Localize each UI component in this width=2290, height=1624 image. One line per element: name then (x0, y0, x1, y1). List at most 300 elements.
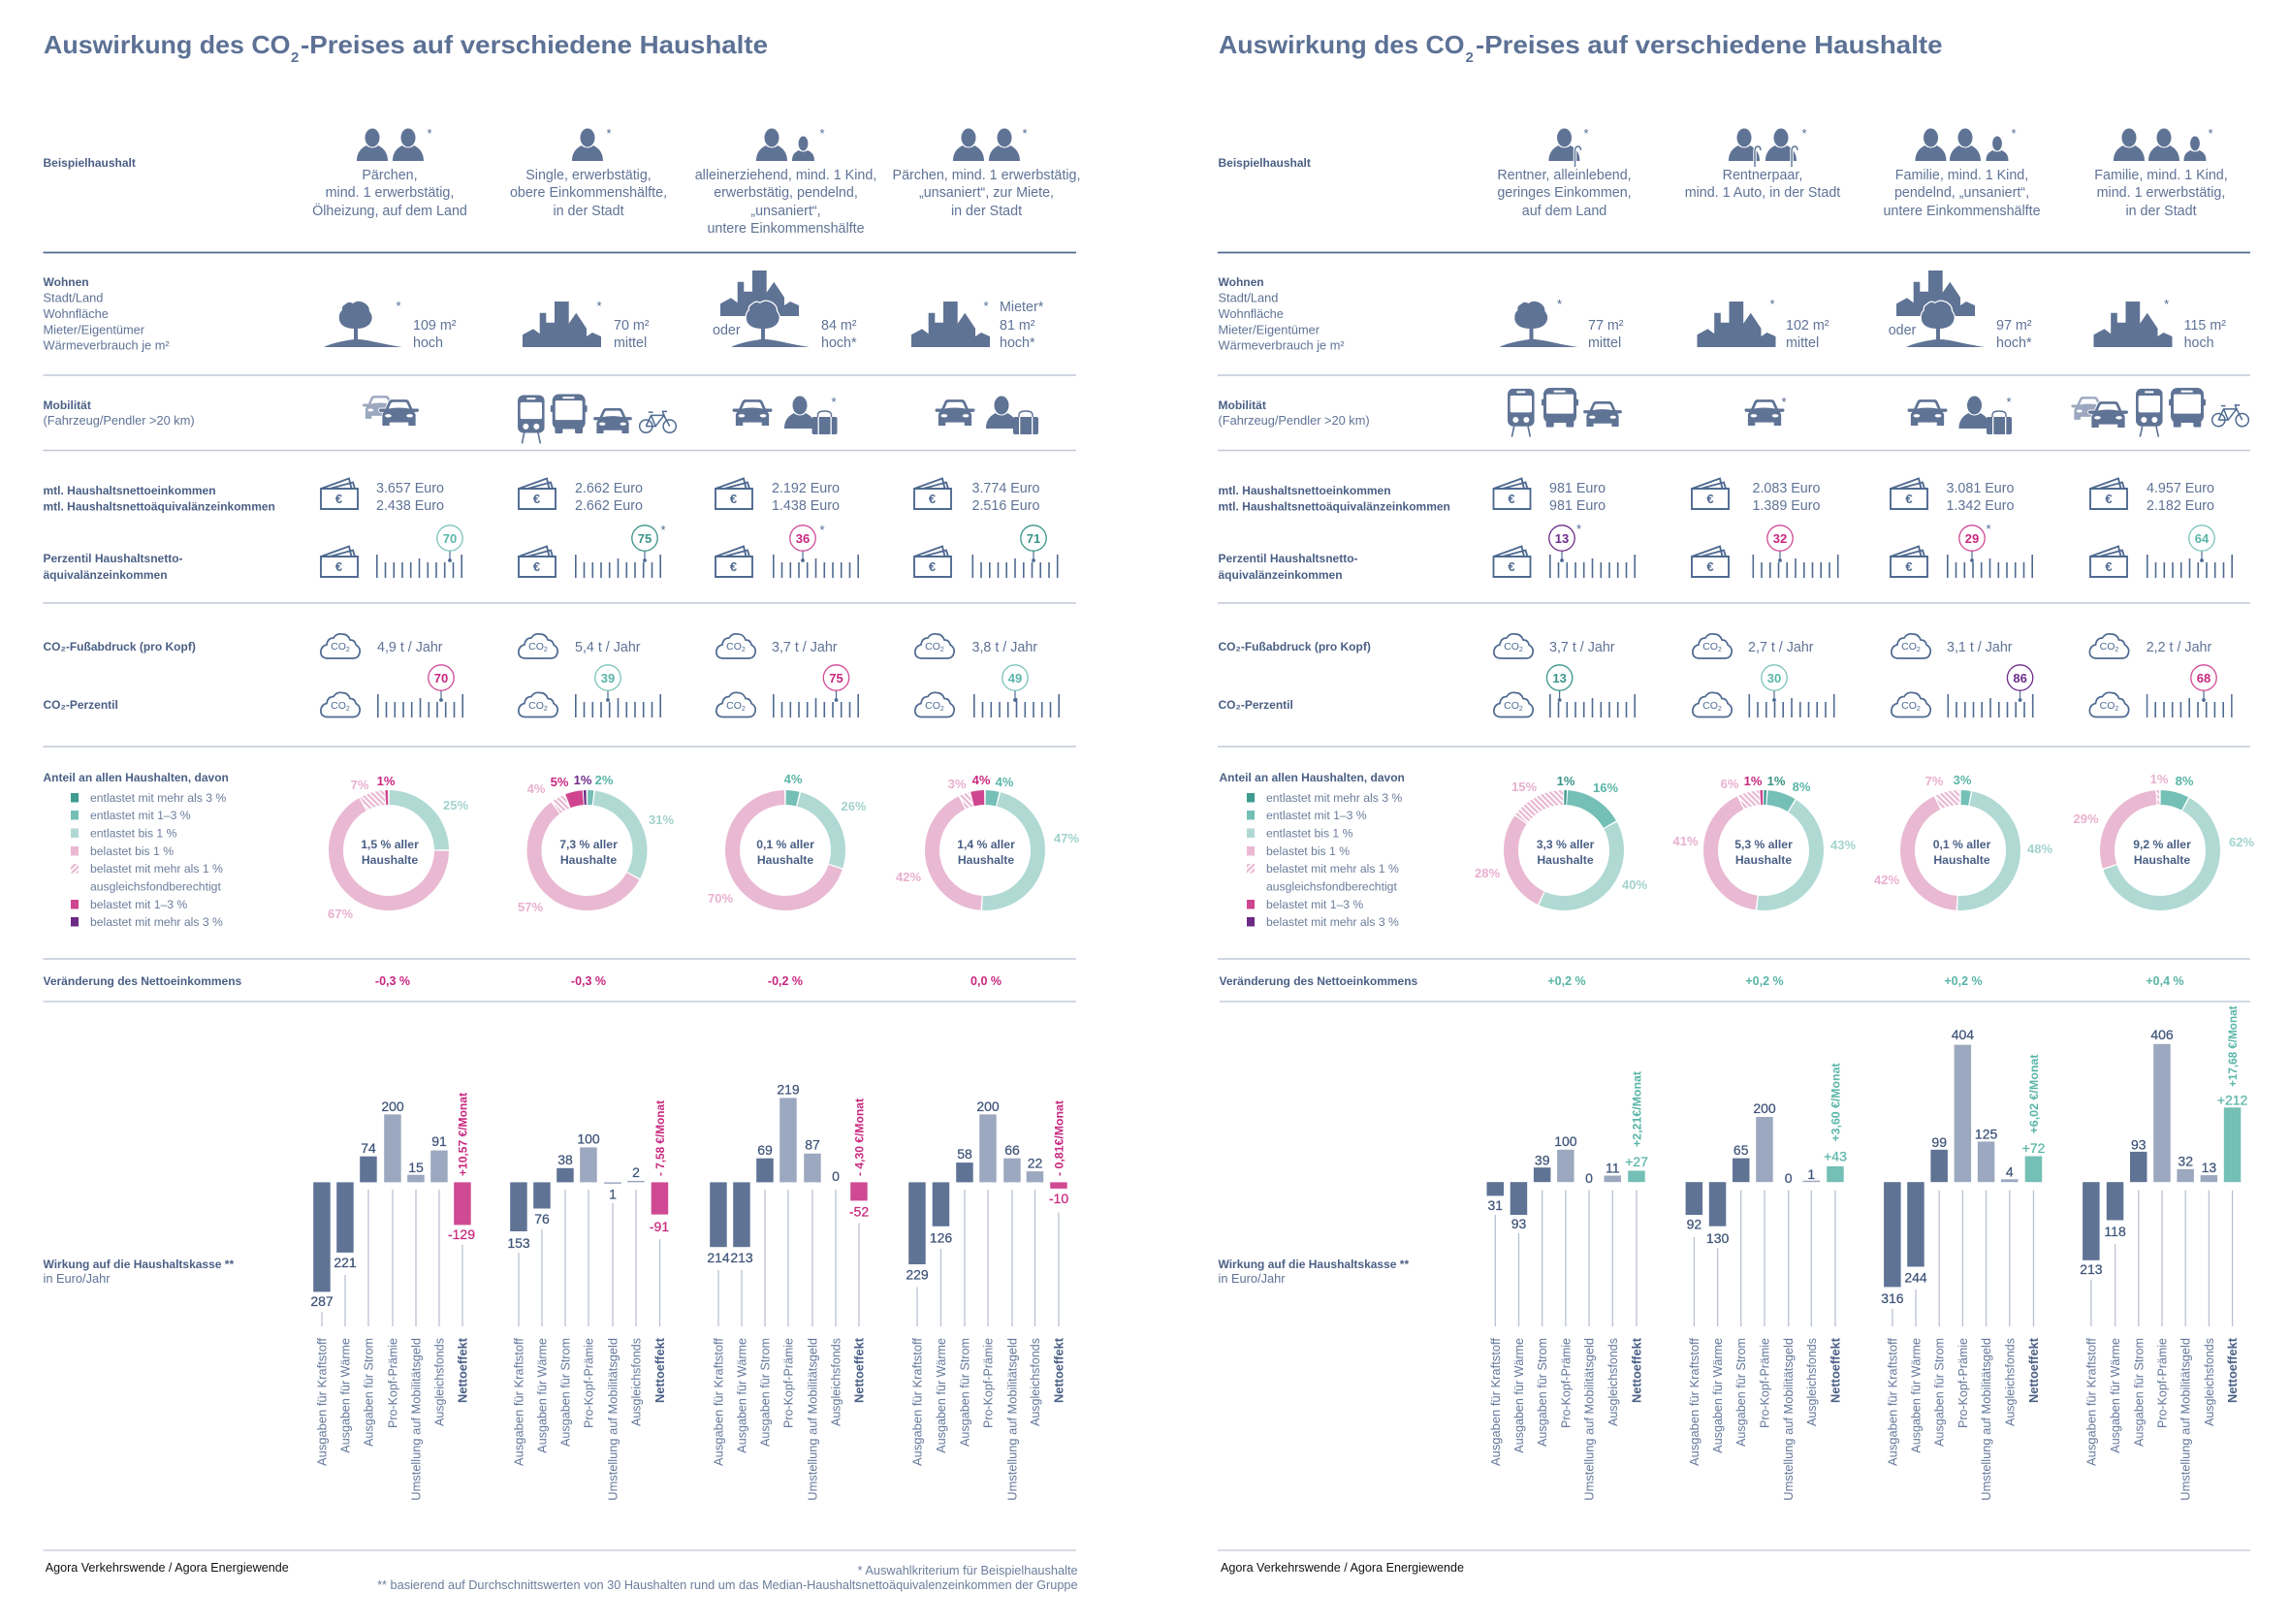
column: Nettoeffekt +43: +43 (1824, 1148, 1847, 1163)
column: Umstellung auf Mobilitätsgeld 15: 15 (408, 1160, 424, 1175)
income: 4.957 Euro: 2.182 Euro (2147, 498, 2214, 514)
column: Nettoeffekt +72: Nettoeffekt (2026, 1337, 2041, 1403)
donut: 0,1 % aller Haushalte: 48% (2027, 842, 2052, 856)
donut: 1,5 % aller Haushalte: Haushalte (362, 853, 418, 867)
footprint 2,2 t: 2,2 t / Jahr (2147, 640, 2211, 655)
housing: Stadt oder Land 84 m²: 84 m² (821, 318, 857, 334)
column: Nettoeffekt -10: - 0,81€/Monat (1053, 1100, 1066, 1176)
column: Nettoeffekt -10: Nettoeffekt (1051, 1337, 1066, 1403)
housing: Stadt 70 m²: mittel (614, 335, 647, 351)
column: Ausgaben für Wärme 213 (730, 1182, 753, 1453)
CO2 footprint row (321, 634, 1037, 658)
households: Beispielhaushalt (1497, 126, 2228, 219)
housing: Land 77 m² (1499, 297, 1624, 351)
donut: 1,4 % aller Haushalte (896, 773, 1079, 904)
income percentile 64: € (2105, 559, 2113, 574)
column: Ausgaben für Kraftstoff 153 (507, 1182, 530, 1466)
household: Single: Single, erwerbstätig, (525, 168, 652, 183)
row labels: Veränderung des Nettoeinkommens (1220, 974, 1418, 988)
income percentile 71: 71 (1027, 531, 1040, 546)
donut: 7,3 % aller Haushalte: 2% (595, 773, 614, 787)
donut: 3,3 % aller Haushalte: 40% (1622, 877, 1647, 892)
net income change values: +0,2 % (1944, 974, 1983, 988)
income: 3.657 Euro: € (335, 492, 342, 506)
bar chart: Rentner, alleinlebend (1487, 1071, 1648, 1501)
legend: belastet bis 1 % (1266, 844, 1350, 858)
column: Ausgleichsfonds 11: Ausgleichsfonds (1606, 1338, 1620, 1426)
mobility: zwei Autos, Bahn, Bus, Rad (2071, 388, 2248, 437)
column: Pro-Kopf-Prämie 219 (777, 1082, 800, 1428)
housing: Stadt oder Land 97 m²: 97 m² (1996, 318, 2032, 334)
panel: right page (1218, 30, 2254, 1575)
row labels (43, 156, 275, 1286)
income: 981 Euro: € (1508, 492, 1515, 506)
household: Pärchen auf dem Land: mind. 1 erwerbstätig, (326, 185, 454, 201)
row labels: CO₂-Perzentil (43, 698, 118, 712)
donut: 5,3 % aller Haushalte: 43% (1830, 838, 1856, 852)
column: Ausgaben für Kraftstoff 229: 229 (906, 1266, 929, 1282)
donut: 0,1 % aller Haushalte: 26% (841, 799, 867, 813)
column: Pro-Kopf-Prämie 200: 200 (1753, 1100, 1776, 1116)
net income change values: -0,3 % (375, 974, 410, 988)
donut: 3,3 % aller Haushalte: Haushalte (1537, 853, 1594, 867)
column: Ausgaben für Kraftstoff 31: Ausgaben für Kraftstoff (1488, 1338, 1503, 1466)
CO2 percentile 70: 2 (346, 706, 350, 713)
donut: 7,3 % aller Haushalte: 57% (518, 900, 543, 914)
column: Ausgleichsfonds 22: 22 (1028, 1156, 1042, 1171)
income percentile 29: € (1905, 559, 1913, 574)
column: Ausgaben für Strom 74 (360, 1140, 377, 1447)
column: Nettoeffekt -10: -10 (1049, 1191, 1068, 1206)
title: 2 (1466, 49, 1474, 66)
row labels: Beispielhaushalt (1218, 156, 1311, 170)
row labels: Wirkung auf die Haushaltskasse ** (43, 1258, 234, 1271)
housing: Stadt 102 m²: 102 m² (1786, 318, 1829, 334)
income percentile 36: * (819, 523, 825, 537)
column: Ausgleichsfonds 91: 91 (431, 1133, 447, 1149)
row labels: Mobilität (43, 398, 91, 412)
column: Ausgaben für Wärme 76: 76 (534, 1211, 550, 1226)
row labels: in Euro/Jahr (1218, 1271, 1286, 1286)
households: Beispielhaushalt (312, 126, 1080, 237)
housing: Mieter 81 m²: * (983, 299, 989, 313)
donut: 1,5 % aller Haushalte: 67% (328, 907, 353, 921)
source line: Agora Verkehrswende / Agora Energiewende (46, 1560, 289, 1575)
column: Nettoeffekt +72: +72 (2022, 1140, 2046, 1156)
column: Ausgaben für Kraftstoff 213 (2080, 1182, 2103, 1466)
panel: left page (43, 30, 1080, 1592)
income: 2.192 Euro (716, 479, 840, 514)
column: Ausgaben für Wärme 126: Ausgaben für Wärme (934, 1338, 948, 1453)
housing: Stadt oder Land 84 m²: hoch* (821, 335, 857, 351)
column: Pro-Kopf-Prämie 200: 200 (976, 1099, 1000, 1114)
footprint 4,9 t: 4,9 t / Jahr (377, 640, 443, 655)
footprint 3,7 t (1494, 634, 1615, 658)
household: Familie, pendelnd: Familie, mind. 1 Kind, (1895, 168, 2028, 183)
household: Familie, in der Stadt: in der Stadt (2125, 204, 2197, 219)
legend: belastet mit mehr als 3 % (90, 915, 223, 929)
CO2 percentile 86: 86 (2013, 671, 2027, 685)
row labels: äquivalänzeinkommen (43, 568, 168, 582)
title (44, 30, 768, 66)
row labels: CO₂-Perzentil (1218, 698, 1293, 712)
income percentile row (321, 523, 1058, 578)
donut: 1,4 % aller Haushalte: 1,4 % aller (957, 838, 1015, 851)
column: Nettoeffekt +72: +6,02 €/Monat (2027, 1054, 2041, 1134)
column: Ausgaben für Kraftstoff 229 (906, 1182, 929, 1466)
footprint 3,7 t: CO (1504, 641, 1519, 653)
footprint 3,7 t (716, 634, 838, 658)
housing: Land 109 m²: 109 m² (413, 318, 457, 334)
row labels: CO₂-Fußabdruck (pro Kopf) (1218, 640, 1371, 653)
housing: Mieter 81 m²: hoch* (1000, 335, 1035, 351)
column: Ausgleichsfonds 2 (627, 1164, 645, 1426)
income: 4.957 Euro (2090, 479, 2214, 514)
household: alleinerziehend (695, 126, 876, 237)
row labels: mtl. Haushaltsnettoäquivalänzeinkommen (43, 500, 275, 514)
household: Familie, in der Stadt: Familie, mind. 1 Kind, (2094, 168, 2228, 183)
income: 981 Euro: 981 Euro (1549, 498, 1606, 514)
donut: 1,5 % aller Haushalte (328, 774, 468, 921)
column: Nettoeffekt -52: -52 (849, 1204, 869, 1220)
net income change values (375, 974, 1002, 988)
footprint 3,1 t: 3,1 t / Jahr (1947, 640, 2013, 655)
column: Umstellung auf Mobilitätsgeld 0 (1582, 1170, 1596, 1501)
column: Ausgaben für Wärme 213: 213 (730, 1250, 753, 1265)
column: Ausgaben für Strom 93 (2130, 1136, 2147, 1447)
column: Nettoeffekt +72 (2022, 1054, 2046, 1403)
income: 2.662 Euro: 2.662 Euro (575, 481, 643, 496)
housing: Land 77 m²: 77 m² (1588, 318, 1624, 334)
housing: Mieter 81 m²: Mieter* (1000, 300, 1044, 315)
column: Pro-Kopf-Prämie 100 (577, 1130, 600, 1428)
footprint 3,7 t: 2 (742, 647, 746, 653)
footprint 3,7 t: 2 (1519, 647, 1523, 653)
column: Ausgaben für Strom 38 (557, 1152, 574, 1447)
column: Ausgleichsfonds 11: 11 (1606, 1160, 1620, 1175)
legend: entlastet mit 1–3 % (90, 809, 191, 822)
donut: 0,1 % aller Haushalte: 0,1 % aller (756, 838, 814, 851)
donut: 5,3 % aller Haushalte: 1% (1767, 774, 1786, 788)
income: 3.774 Euro (914, 479, 1039, 514)
column: Pro-Kopf-Prämie 406: 406 (2150, 1027, 2174, 1042)
column: Ausgaben für Kraftstoff 31: 31 (1488, 1197, 1503, 1213)
mobility: Auto und Pendler (1908, 395, 2012, 434)
household: Familie, pendelnd: pendelnd, „unsaniert“, (1894, 185, 2029, 201)
column: Ausgleichsfonds 22 (1027, 1156, 1043, 1426)
column: Ausgleichsfonds 13: 13 (2202, 1160, 2216, 1175)
housing: Mieter 81 m² (911, 299, 1044, 351)
column: Ausgleichsfonds 1: 1 (1807, 1166, 1815, 1182)
column: Ausgaben für Strom 65 (1733, 1142, 1749, 1447)
housing: Stadt 70 m²: * (596, 299, 602, 313)
household: alleinerziehend: untere Einkommenshälfte (707, 221, 865, 237)
footprint 3,8 t: 2 (940, 647, 944, 653)
column: Ausgleichsfonds 91 (430, 1133, 448, 1426)
income percentile 13: * (1576, 522, 1581, 536)
CO2 percentile 86: 2 (1917, 706, 1921, 713)
household: Rentner, alleinlebend (1497, 126, 1632, 219)
footprint 2,2 t: 2 (2115, 647, 2118, 653)
income row (321, 479, 1039, 514)
housing: Stadt oder Land 84 m²: oder (713, 323, 741, 338)
housing: Mieter 81 m²: 81 m² (1000, 318, 1035, 334)
column: Ausgaben für Strom 74: Ausgaben für Strom (361, 1338, 376, 1447)
donut: 1,4 % aller Haushalte: 4% (972, 773, 991, 787)
column: Nettoeffekt -91: Nettoeffekt (652, 1337, 667, 1403)
household: Rentnerpaar (1685, 126, 1840, 201)
donut: 3,3 % aller Haushalte: 15% (1511, 780, 1537, 794)
bar chart: Pärchen auf dem Land (310, 1093, 475, 1501)
column: Ausgleichsfonds 91: Ausgleichsfonds (432, 1338, 446, 1426)
donut: 9,2 % aller Haushalte: 9,2 % aller (2133, 838, 2191, 851)
CO2 percentile 70: 70 (434, 671, 448, 685)
column: Umstellung auf Mobilitätsgeld 32: Umstellung auf Mobilitätsgeld (2179, 1338, 2193, 1501)
column: Pro-Kopf-Prämie 406 (2150, 1027, 2174, 1428)
title: Auswirkung des CO (1219, 30, 1464, 59)
column: Ausgleichsfonds 1 (1803, 1166, 1820, 1426)
title (1219, 30, 1943, 66)
row labels: mtl. Haushaltsnettoeinkommen (1218, 484, 1391, 497)
CO2 percentile 39: CO (528, 700, 544, 712)
CO2 percentile 13: 13 (1552, 671, 1567, 685)
household: Rentner, alleinlebend: auf dem Land (1522, 204, 1606, 219)
household: Familie, in der Stadt (2094, 126, 2228, 219)
row labels: Wärmeverbrauch je m² (1218, 337, 1345, 353)
footprint 3,1 t: CO (1901, 641, 1917, 653)
column: Nettoeffekt -52 (849, 1099, 869, 1403)
column: Ausgaben für Kraftstoff 92 (1686, 1182, 1702, 1466)
net income change values: -0,3 % (571, 974, 606, 988)
income: 981 Euro: 981 Euro (1549, 481, 1606, 496)
housing: Stadt 115 m² (2094, 297, 2226, 351)
row labels: Wohnfläche (1218, 306, 1284, 321)
CO2 percentile 75: CO (726, 700, 742, 712)
title: 2 (291, 49, 299, 66)
row labels: Wohnen (43, 275, 89, 289)
net income change values: +0,2 % (1745, 974, 1784, 988)
income: 4.957 Euro: € (2105, 492, 2113, 506)
column: Nettoeffekt -91 (650, 1100, 669, 1403)
housing: Land 77 m²: * (1557, 297, 1562, 311)
column: Ausgaben für Wärme 93: 93 (1511, 1216, 1526, 1231)
column: Umstellung auf Mobilitätsgeld 66: Umstellung auf Mobilitätsgeld (1004, 1338, 1020, 1501)
household: alleinerziehend: „unsaniert“, (750, 204, 821, 219)
household: alleinerziehend: erwerbstätig, pendelnd, (714, 185, 858, 201)
column: Ausgaben für Kraftstoff 316 (1881, 1182, 1904, 1466)
column: Pro-Kopf-Prämie 406: Pro-Kopf-Prämie (2154, 1338, 2170, 1428)
column: Nettoeffekt -91: -91 (650, 1219, 669, 1234)
row labels: Mieter/Eigentümer (1218, 322, 1320, 337)
household: alleinerziehend: alleinerziehend, mind. 1 Kind, (695, 168, 876, 183)
household: Pärchen auf dem Land: * (427, 126, 432, 141)
column: Ausgaben für Strom 69 (756, 1142, 774, 1447)
CO2 percentile 49: 49 (1008, 671, 1022, 685)
column: Ausgaben für Strom 65: Ausgaben für Strom (1733, 1338, 1748, 1447)
household: Single: in der Stadt (553, 204, 624, 219)
footprint 4,9 t: 2 (346, 647, 350, 653)
donut: 0,1 % aller Haushalte (708, 772, 867, 906)
footnotes (377, 1563, 1078, 1592)
donut: 1,4 % aller Haushalte: 4% (996, 775, 1014, 789)
donut: 9,2 % aller Haushalte: 1% (2150, 772, 2169, 786)
donut: 0,1 % aller Haushalte: 4% (784, 772, 803, 786)
income: 2.662 Euro: 2.662 Euro (575, 498, 643, 514)
column: Ausgleichsfonds 4: Ausgleichsfonds (2002, 1338, 2017, 1426)
donut: 1,5 % aller Haushalte: 25% (443, 798, 468, 812)
column: Ausgaben für Strom 74: 74 (361, 1140, 376, 1156)
column: Ausgaben für Wärme 76: Ausgaben für Wärme (535, 1338, 549, 1453)
CO2 percentile 30: CO (1702, 700, 1718, 712)
column: Umstellung auf Mobilitätsgeld 1 (604, 1182, 621, 1501)
column: Pro-Kopf-Prämie 200: Pro-Kopf-Prämie (981, 1338, 995, 1428)
column: Ausgaben für Wärme 221 (334, 1182, 357, 1453)
income percentile row (1493, 522, 2232, 578)
column: Umstellung auf Mobilitätsgeld 0: 0 (1585, 1170, 1593, 1186)
donut: 7,3 % aller Haushalte: 31% (649, 812, 674, 827)
donut: 9,2 % aller Haushalte: 62% (2229, 835, 2254, 849)
legend: entlastet bis 1 % (90, 826, 177, 840)
donut: 3,3 % aller Haushalte (1475, 774, 1647, 904)
column: Ausgaben für Wärme 126: 126 (930, 1229, 952, 1245)
column: Pro-Kopf-Prämie 100: 100 (577, 1130, 600, 1146)
donut: 7,3 % aller Haushalte: Haushalte (560, 853, 617, 867)
row labels: Beispielhaushalt (43, 156, 136, 170)
housing: Land 77 m²: mittel (1588, 335, 1621, 351)
footprint 3,8 t: 3,8 t / Jahr (971, 640, 1037, 655)
donut: 5,3 % aller Haushalte: Haushalte (1735, 853, 1792, 867)
housing row (1499, 271, 2226, 351)
donut: 1,4 % aller Haushalte: 47% (1054, 831, 1079, 845)
housing: Land 109 m²: hoch (413, 335, 443, 351)
mobility: Auto und Pendler (733, 395, 838, 434)
mobility: Auto (1745, 395, 1787, 426)
CO2 percentile 68: 2 (2115, 706, 2118, 713)
column: Ausgaben für Strom 58 (956, 1146, 973, 1447)
household: Single (510, 126, 667, 219)
footprint 4,9 t: CO (331, 641, 346, 653)
donut: 5,3 % aller Haushalte: 8% (1793, 780, 1811, 794)
column: Pro-Kopf-Prämie 100: Pro-Kopf-Prämie (1558, 1338, 1573, 1428)
donut: 9,2 % aller Haushalte: 8% (2176, 774, 2194, 788)
column: Umstellung auf Mobilitätsgeld 32 (2177, 1154, 2194, 1501)
column: Ausgleichsfonds 0: 0 (832, 1168, 840, 1184)
column: Umstellung auf Mobilitätsgeld 32: 32 (2178, 1154, 2193, 1169)
column: Ausgaben für Wärme 130: Ausgaben für Wärme (1710, 1338, 1725, 1453)
column: Ausgaben für Strom 99: Ausgaben für Strom (1932, 1338, 1947, 1447)
income: 3.657 Euro (321, 479, 444, 514)
housing: Stadt 102 m² (1697, 297, 1829, 351)
column: Ausgleichsfonds 13 (2201, 1160, 2217, 1426)
household: Pärchen zur Miete: in der Stadt (951, 204, 1022, 219)
mobility: Bahn, Bus, Auto, Rad (518, 395, 676, 444)
row labels: mtl. Haushaltsnettoäquivalänzeinkommen (1218, 500, 1450, 514)
column: Umstellung auf Mobilitätsgeld 87 (804, 1136, 821, 1501)
title: -Preises auf verschiedene Haushalte (301, 30, 768, 59)
footprint 2,7 t: 2,7 t / Jahr (1748, 640, 1814, 655)
column: Ausgaben für Strom 93: 93 (2131, 1136, 2147, 1152)
income percentile 71 (914, 525, 1058, 578)
donut: 3,3 % aller Haushalte: 28% (1475, 866, 1500, 880)
column: Umstellung auf Mobilitätsgeld 125: 125 (1975, 1127, 1997, 1142)
column: Nettoeffekt -129: +10,57 €/Monat (456, 1093, 469, 1176)
column: Pro-Kopf-Prämie 200 (381, 1099, 404, 1428)
column: Ausgaben für Strom 58: 58 (957, 1146, 972, 1162)
legend: belastet mit mehr als 1 % (90, 862, 223, 876)
title: -Preises auf verschiedene Haushalte (1476, 30, 1943, 59)
housing: Land 109 m²: * (396, 299, 401, 313)
bar chart: Familie, pendelnd (1881, 1027, 2046, 1501)
CO2 percentile 70: CO (331, 700, 346, 712)
column: Nettoeffekt +43: +3,60 €/Monat (1829, 1063, 1842, 1142)
net income change values: +0,4 % (2146, 974, 2184, 988)
income percentile 29 (1891, 522, 2032, 578)
income percentile 75: * (660, 523, 666, 537)
income: 3.657 Euro: 2.438 Euro (376, 498, 444, 514)
column: Ausgaben für Kraftstoff 92: Ausgaben für Kraftstoff (1687, 1338, 1702, 1466)
column: Pro-Kopf-Prämie 404: Pro-Kopf-Prämie (1956, 1338, 1970, 1428)
household: Familie, pendelnd: * (2011, 126, 2017, 141)
column: Ausgleichsfonds 2: Ausgleichsfonds (628, 1338, 644, 1426)
legend: entlastet mit 1–3 % (1266, 809, 1367, 822)
CO2 percentile 70 (321, 665, 462, 717)
column: Pro-Kopf-Prämie 219: 219 (777, 1082, 800, 1098)
column: Pro-Kopf-Prämie 200: Pro-Kopf-Prämie (1757, 1338, 1772, 1428)
donut: 1,4 % aller Haushalte: 3% (948, 777, 967, 791)
column: Ausgleichsfonds 22: Ausgleichsfonds (1028, 1338, 1042, 1426)
footprint 3,1 t (1892, 634, 2013, 658)
column: Ausgaben für Kraftstoff 287 (310, 1182, 334, 1466)
income: 3.774 Euro: € (929, 492, 936, 506)
column: Ausgaben für Kraftstoff 213: 213 (2080, 1261, 2103, 1277)
income percentile 64 (2090, 525, 2232, 578)
net income change values (1547, 974, 2184, 988)
column: Nettoeffekt -129 (448, 1093, 475, 1403)
household: Familie, in der Stadt: * (2208, 126, 2213, 141)
donut: 1,4 % aller Haushalte: Haushalte (958, 853, 1014, 867)
CO2 percentile 30: 30 (1767, 671, 1781, 685)
CO2 percentile 68 (2089, 665, 2232, 717)
column: Umstellung auf Mobilitätsgeld 1: Umstellung auf Mobilitätsgeld (605, 1338, 620, 1501)
column: Umstellung auf Mobilitätsgeld 87: Umstellung auf Mobilitätsgeld (805, 1338, 820, 1501)
household: Familie, pendelnd (1883, 126, 2041, 219)
mobility: Auto und Pendler: * (831, 395, 837, 409)
column: Nettoeffekt -129: -129 (448, 1226, 475, 1242)
column: Nettoeffekt +212: Nettoeffekt (2225, 1337, 2240, 1403)
income: 3.657 Euro: 3.657 Euro (376, 481, 444, 496)
row labels: Mobilität (1218, 398, 1266, 412)
mobility row (363, 395, 1038, 444)
CO2 percentile 75: 2 (742, 706, 746, 713)
household: Pärchen auf dem Land: Ölheizung, auf dem Land (312, 202, 467, 219)
income row (1493, 479, 2214, 514)
net income change values: 0,0 % (970, 974, 1002, 988)
legend: belastet mit 1–3 % (1266, 898, 1363, 911)
housing: Stadt oder Land 97 m² (1889, 271, 2032, 351)
household: Familie, pendelnd: untere Einkommenshälfte (1883, 204, 2041, 219)
column: Ausgaben für Wärme 244: 244 (1904, 1270, 1927, 1286)
donut: 7,3 % aller Haushalte: 1% (574, 773, 592, 787)
income: 2.083 Euro (1692, 479, 1820, 514)
CO2 percentile 13 (1494, 665, 1635, 717)
column: Ausgleichsfonds 0: Ausgleichsfonds (828, 1338, 843, 1426)
column: Ausgaben für Kraftstoff 31 (1487, 1182, 1504, 1466)
mobility: Auto: * (1781, 395, 1787, 409)
donut: 0,1 % aller Haushalte: 70% (708, 891, 733, 906)
column: Ausgaben für Kraftstoff 287: Ausgaben für Kraftstoff (314, 1338, 330, 1466)
column: Ausgaben für Wärme 93: Ausgaben für Wärme (1511, 1338, 1526, 1453)
household: Pärchen zur Miete (893, 126, 1080, 219)
